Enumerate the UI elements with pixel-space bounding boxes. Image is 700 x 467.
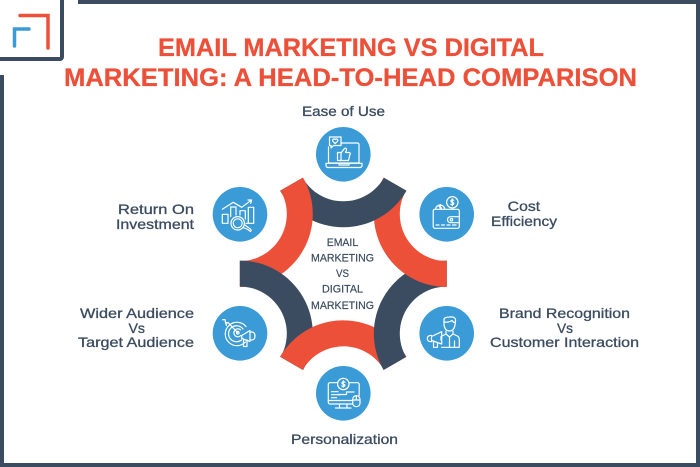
label: wider audience vs target audience: Vs <box>128 320 145 336</box>
icon: target audience <box>213 306 267 361</box>
center text: VS <box>336 268 349 280</box>
arc: lower right navy <box>352 242 458 377</box>
title: EMAIL MARKETING VS DIGITAL <box>158 34 544 62</box>
icon: return on investment chart <box>213 187 267 242</box>
label: brand recognition vs customer interaction: Customer Interaction <box>490 334 639 350</box>
icon: personalization monitor <box>316 366 371 421</box>
arc: lower left navy <box>229 242 335 377</box>
arc: bottom orange overlap on lower left navy <box>280 320 344 370</box>
label: ease of use: Ease of Use <box>302 103 385 119</box>
logo <box>0 0 62 59</box>
label: cost efficiency: Cost <box>508 198 540 214</box>
arc: top navy <box>280 178 406 227</box>
arc: upper left orange <box>229 171 335 305</box>
label: return on investment: Return On <box>118 201 194 217</box>
label: wider audience vs target audience: Wider Audience <box>80 305 194 321</box>
icon: ease of use laptop <box>316 127 371 182</box>
center text: MARKETING <box>311 253 374 265</box>
label: personalization: Personalization <box>291 431 398 447</box>
icon: cost efficiency wallet <box>419 187 474 242</box>
label: wider audience vs target audience <box>78 305 194 350</box>
label: brand recognition vs customer interaction: Vs <box>557 320 573 336</box>
label: return on investment <box>116 201 194 232</box>
center text: EMAIL <box>327 237 358 249</box>
center text: MARKETING <box>311 300 374 312</box>
label: cost efficiency: Efficiency <box>491 213 557 229</box>
label: brand recognition vs customer interaction: Brand Recognition <box>499 305 630 321</box>
label: cost efficiency <box>491 198 557 229</box>
label: return on investment: Investment <box>116 216 194 232</box>
label: brand recognition vs customer interaction <box>490 305 639 350</box>
icon: brand recognition person with megaphone <box>419 306 474 361</box>
title <box>64 34 637 92</box>
title: MARKETING: A HEAD-TO-HEAD COMPARISON <box>64 64 637 92</box>
arc: bottom orange <box>280 320 406 370</box>
center text: DIGITAL <box>322 284 363 296</box>
arc: upper right orange <box>352 171 458 305</box>
center text <box>311 237 374 312</box>
interlocking ring of arcs <box>229 171 458 377</box>
label: wider audience vs target audience: Target Audience <box>78 334 194 350</box>
